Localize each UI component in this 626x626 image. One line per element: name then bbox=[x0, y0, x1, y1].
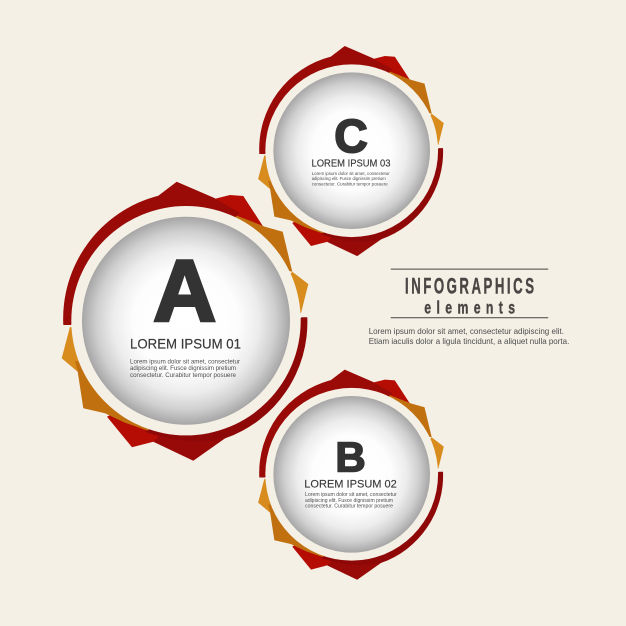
text block C bbox=[312, 171, 390, 187]
title: infographics: INFOGRAPHICS bbox=[405, 274, 534, 298]
description text: Lorem ipsum dolor sit amet, consectetur adipiscing elit. bbox=[369, 326, 564, 336]
letter C: C bbox=[334, 110, 368, 162]
panel: circle A bbox=[62, 182, 308, 461]
heading: lorem ipsum 03: LOREM IPSUM 03 bbox=[312, 159, 391, 170]
letter B: B bbox=[335, 434, 366, 480]
text block B bbox=[305, 492, 397, 510]
letter A: A bbox=[153, 243, 216, 340]
text block B: consectetur. Curabitur tempor posuere bbox=[305, 504, 393, 510]
text block A: adipiscing elit. Fusce dignissim pretium bbox=[130, 366, 236, 372]
text block C: adipiscing elit. Fusce dignissim pretium bbox=[312, 176, 386, 181]
heading: lorem ipsum 01: LOREM IPSUM 01 bbox=[130, 336, 241, 352]
panel: circle C bbox=[258, 46, 444, 256]
icon: gear ring C bbox=[258, 46, 444, 256]
text block A bbox=[130, 360, 240, 379]
top rule bbox=[391, 268, 548, 270]
panel: title block bbox=[369, 268, 569, 346]
subtitle: elements: elements bbox=[424, 298, 515, 318]
text block C: consectetur. Curabitur tempor posuere bbox=[312, 182, 388, 187]
text block A: consectetur. Curabitur tempor posuere bbox=[130, 373, 237, 379]
bottom rule bbox=[391, 317, 548, 318]
text block A: Lorem ipsum dolor sit amet, consectetur bbox=[130, 360, 240, 366]
text block C: Lorem ipsum dolor sit amet, consectetur bbox=[312, 171, 390, 176]
description text: Etiam iaculis dolor a ligula tincidunt, a aliquet nulla porta. bbox=[369, 336, 569, 346]
text block B: Lorem ipsum dolor sit amet, consectetur bbox=[305, 492, 397, 498]
heading: lorem ipsum 02: LOREM IPSUM 02 bbox=[304, 479, 397, 491]
icon: gear ring A bbox=[62, 182, 308, 461]
description text bbox=[369, 326, 569, 346]
panel: circle B bbox=[258, 370, 444, 580]
icon: gear ring B bbox=[258, 370, 444, 580]
text block B: adipiscing elit. Fusce dignissim pretium bbox=[305, 498, 393, 504]
